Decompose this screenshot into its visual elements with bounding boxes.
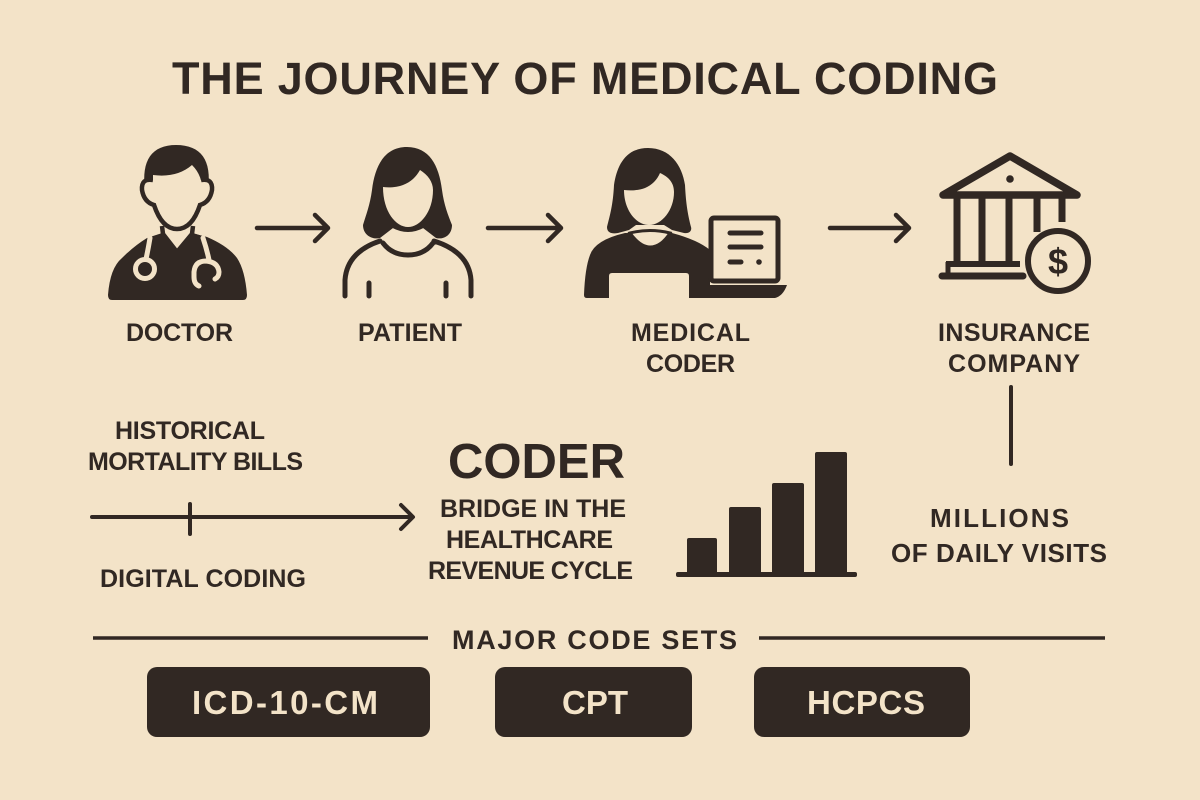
timeline arrow [92,504,413,534]
text: bridge description: HEALTHCARE [446,526,613,554]
text: millions of daily visits: MILLIONS [930,503,1069,533]
icon: patient [345,147,471,296]
button: ICD-10-CM: ICD-10-CM [192,684,378,721]
heading: major code sets: MAJOR CODE SETS [452,625,737,655]
text: historical mortality bills: HISTORICAL [115,417,265,445]
text: millions of daily visits: OF DAILY VISITS [891,538,1107,568]
bar chart [676,452,857,577]
button: HCPCS: HCPCS [807,684,925,721]
text: CODER [646,350,735,378]
icon: insurance bank with dollar: $ [1048,241,1068,282]
icon: doctor [108,145,247,300]
icon: insurance bank with dollar [942,156,1088,291]
arrow: patient to coder [488,215,561,241]
button: HCPCS [754,667,970,737]
label: insurance company: INSURANCE [938,319,1090,347]
button: CPT: CPT [562,684,628,721]
label: patient: PATIENT [358,319,462,347]
text: MORTALITY BILLS [88,448,303,476]
arrow: coder to insurance [830,215,909,241]
heading: coder: CODER [448,435,625,489]
label: doctor: DOCTOR [126,319,233,347]
label: medical coder: MEDICAL [631,319,750,347]
connector line [1009,387,1013,464]
text: millions of daily visits [891,503,1107,568]
button: ICD-10-CM [147,667,430,737]
button: CPT [495,667,692,737]
text: digital coding: DIGITAL CODING [100,565,306,593]
title: THE JOURNEY OF MEDICAL CODING [172,53,998,104]
text: bridge description [428,495,633,585]
text: COMPANY [948,350,1080,378]
icon: medical coder [584,148,787,298]
text: bridge description: REVENUE CYCLE [428,557,633,585]
text: bridge description: BRIDGE IN THE [440,495,626,523]
arrow: doctor to patient [257,215,328,241]
